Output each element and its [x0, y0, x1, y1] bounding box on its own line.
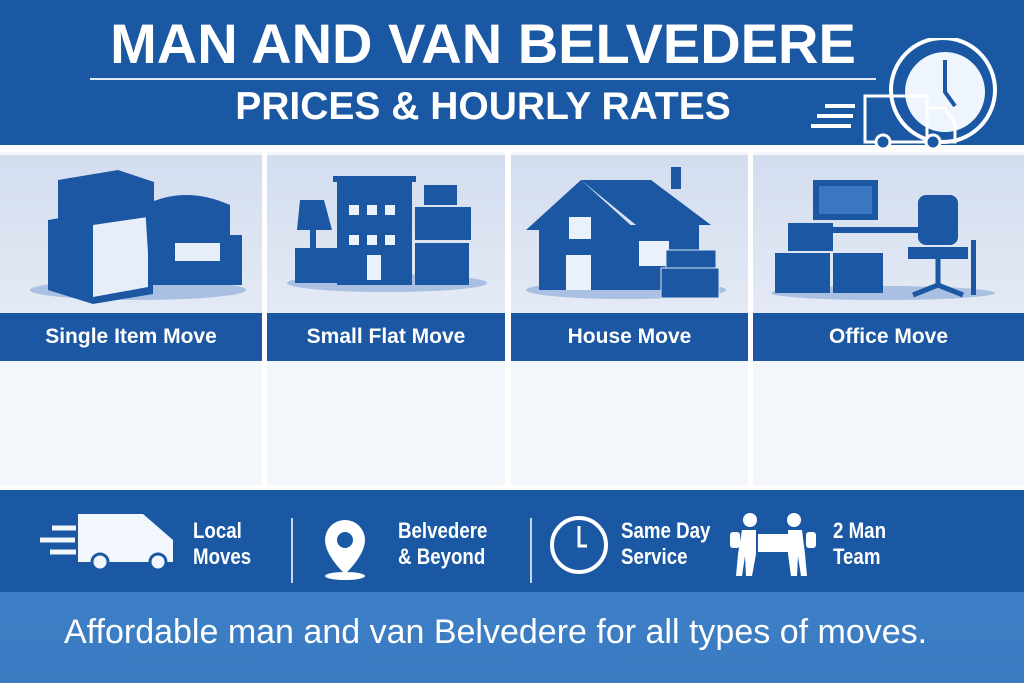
text: belvedere & beyond: & Beyond	[398, 544, 485, 569]
panel: single item move	[0, 152, 262, 485]
label	[0, 313, 262, 361]
icon: two men with box	[730, 513, 816, 576]
icon: van and clock	[811, 38, 997, 148]
features band	[0, 490, 1024, 592]
panel: office move	[753, 152, 1024, 485]
label: Small Flat Move	[307, 325, 465, 348]
text: same day service	[621, 518, 710, 569]
text: belvedere & beyond: Belvedere	[398, 518, 487, 543]
icon: clock	[550, 516, 608, 574]
label	[511, 313, 748, 361]
label: House Move	[568, 325, 691, 348]
text: 2 man team: 2 Man	[833, 518, 886, 543]
icon: house	[511, 155, 748, 313]
title: MAN AND VAN BELVEDERE	[110, 12, 856, 75]
icon: building	[267, 155, 505, 313]
text: belvedere & beyond	[398, 518, 487, 569]
icon: boxes and armchair	[0, 155, 262, 313]
subtitle: PRICES & HOURLY RATES	[235, 85, 731, 128]
text: same day service: Service	[621, 544, 688, 569]
label	[267, 313, 505, 361]
panel: house move	[511, 152, 748, 485]
text: local moves: Local	[193, 518, 242, 543]
header	[0, 0, 1024, 145]
text: 2 man team	[833, 518, 886, 569]
text: local moves	[193, 518, 251, 569]
text: same day service: Same Day	[621, 518, 710, 543]
text: 2 man team: Team	[833, 544, 880, 569]
label: Single Item Move	[45, 325, 217, 348]
label: Office Move	[829, 325, 948, 348]
text: local moves: Moves	[193, 544, 251, 569]
icon: location pin	[325, 520, 365, 580]
footer band	[0, 592, 1024, 683]
icon: office desk	[753, 155, 1024, 313]
icon: van	[40, 514, 173, 568]
tagline: Affordable man and van Belvedere for all types of moves.	[64, 613, 927, 651]
panel: small flat move	[267, 152, 505, 485]
label	[753, 313, 1024, 361]
